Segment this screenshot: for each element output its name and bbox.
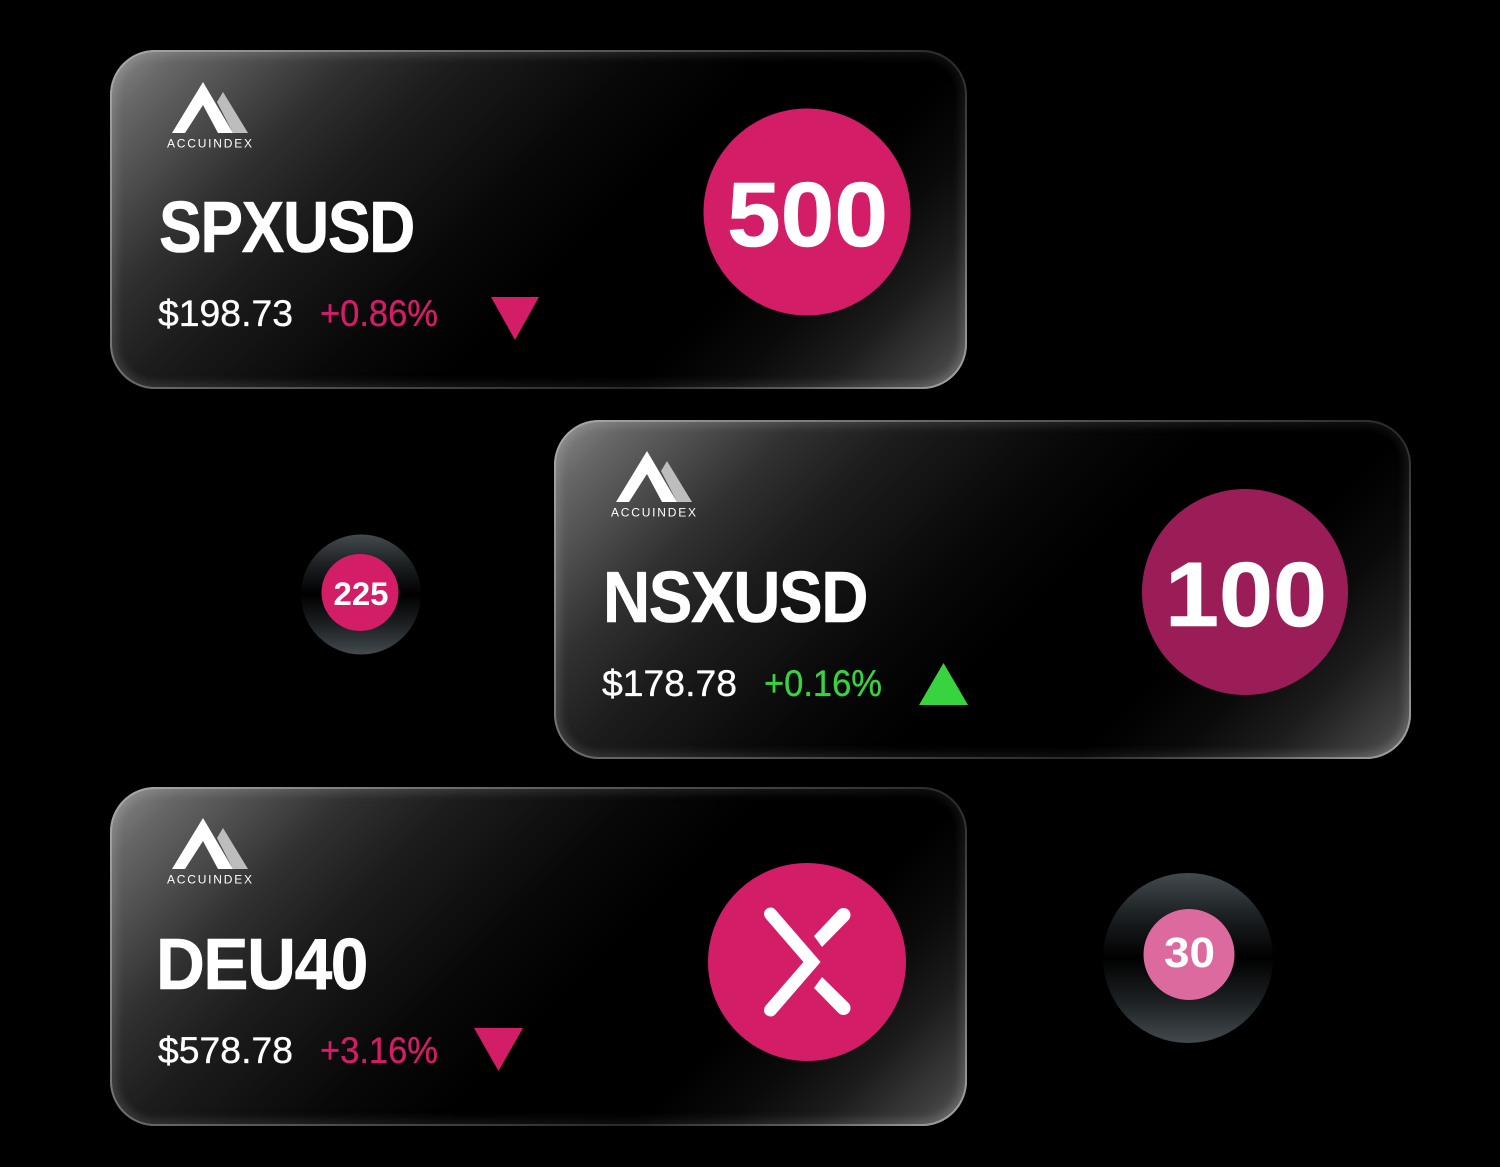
- icon: X mark badge: [708, 863, 906, 1061]
- change percent: +0.86%: [320, 293, 438, 334]
- price: $178.78: [602, 663, 737, 704]
- price: $578.78: [158, 1030, 293, 1071]
- icon: up arrow: [919, 663, 968, 705]
- badge: 100: 100: [1165, 544, 1327, 646]
- icon: Accuindex logo: [167, 818, 252, 886]
- card background: [554, 420, 1411, 759]
- badge: 30: [1103, 873, 1273, 1043]
- card background: [110, 50, 967, 389]
- badge: 30: 30: [1164, 929, 1215, 977]
- price: $198.73: [158, 293, 293, 334]
- badge: 500: [704, 108, 910, 316]
- icon: Accuindex logo: ACCUINDEX: [167, 872, 252, 886]
- card background: [110, 787, 967, 1126]
- badge: 225: 225: [334, 576, 388, 612]
- heading: SPXUSD: SPXUSD: [159, 188, 414, 268]
- panel: SPXUSD card: [110, 50, 967, 389]
- change percent: +0.16%: [764, 663, 882, 704]
- heading: DEU40: DEU40: [156, 925, 367, 1005]
- heading: NSXUSD: NSXUSD: [603, 558, 867, 638]
- icon: Accuindex logo: ACCUINDEX: [611, 506, 696, 520]
- icon: Accuindex logo: ACCUINDEX: [167, 136, 252, 150]
- change percent: +3.16%: [320, 1030, 438, 1071]
- panel: DEU40 card: [110, 787, 967, 1126]
- badge: 100: [1142, 489, 1348, 695]
- icon: down arrow: [491, 297, 539, 340]
- icon: Accuindex logo: [611, 451, 696, 520]
- badge: 500: 500: [727, 164, 888, 266]
- icon: Accuindex logo: [167, 82, 252, 150]
- panel: NSXUSD card: [554, 420, 1411, 759]
- badge: 225: [301, 534, 421, 654]
- icon: down arrow: [474, 1028, 523, 1071]
